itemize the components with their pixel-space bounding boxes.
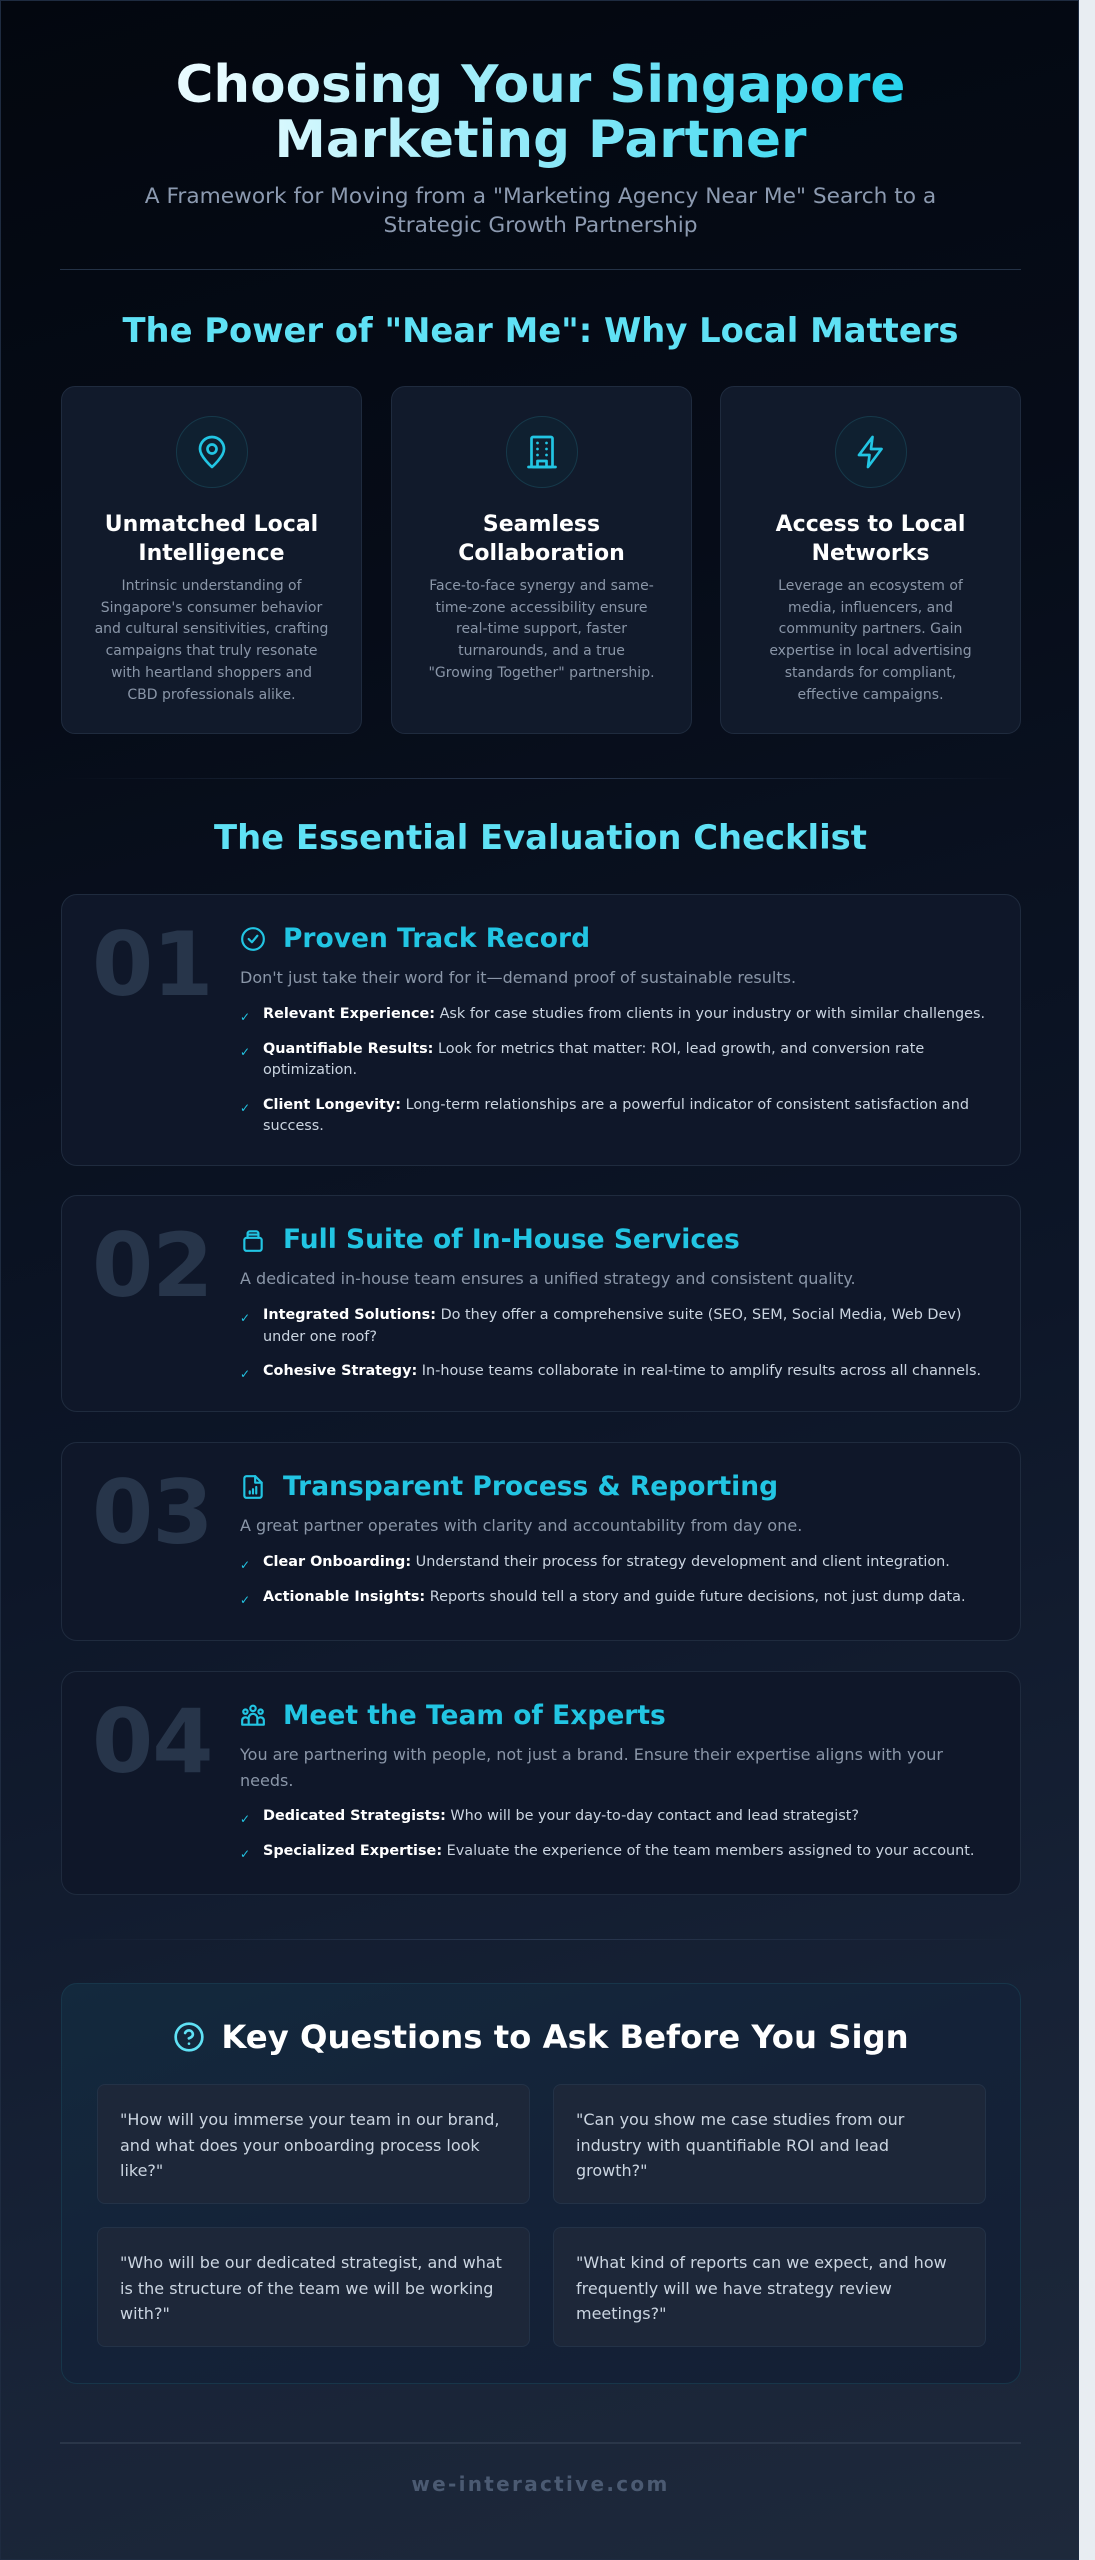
question 4: "What kind of reports can we expect, and how frequently will we have strategy review meetings?": [576, 2253, 947, 2323]
bullet list: Quantifiable Results: Look for metrics that matter: ROI, lead growth, and conversion rate optimization.: [263, 1040, 924, 1078]
bullet list: Client Longevity: Long-term relationships are a powerful indicator of consistent satisfaction and success.: [263, 1096, 969, 1134]
question 1: [97, 2084, 530, 2204]
bullet list: Actionable Insights: Reports should tell a story and guide future decisions, not just dump data.: [263, 1588, 966, 1604]
card subtitle: You are partnering with people, not just a brand. Ensure their expertise aligns with your needs.: [240, 1745, 943, 1790]
card text: "Growing Together" partnership.: [428, 665, 655, 681]
card text: [95, 578, 328, 703]
card text: campaigns that truly resonate: [106, 643, 317, 659]
icon: map pin: [176, 416, 248, 488]
title: Choosing Your Singapore: [176, 55, 905, 115]
heading: why local matters: The Power of "Near Me": Why Local Matters: [122, 311, 959, 350]
card subtitle: A great partner operates with clarity and accountability from day one.: [240, 1516, 802, 1535]
card text: time-zone accessibility ensure: [435, 600, 648, 616]
card title: Intelligence: [138, 541, 285, 566]
icon: lightning: [835, 416, 907, 488]
number 04: 04: [92, 1690, 212, 1793]
card text: real-time support, faster: [456, 621, 627, 637]
question 1: "How will you immerse your team in our brand, and what does your onboarding process look like?": [120, 2110, 500, 2180]
title: Marketing Partner: [274, 110, 806, 170]
bullet list: Specialized Expertise: Evaluate the experience of the team members assigned to your account.: [263, 1842, 975, 1858]
card text: with heartland shoppers and: [111, 665, 312, 681]
bullet list: [242, 1554, 966, 1604]
subtitle: Strategic Growth Partnership: [384, 213, 697, 238]
panel: key questions: [61, 1983, 1021, 2384]
subtitle: [145, 184, 936, 238]
panel: local networks: [720, 386, 1021, 734]
number 02: 02: [92, 1214, 212, 1317]
card title: [776, 512, 965, 566]
card text: community partners. Gain: [779, 621, 962, 637]
number 01: 01: [92, 913, 212, 1016]
title: [1, 58, 1080, 168]
card text: expertise in local advertising: [769, 643, 972, 659]
card subtitle: Don't just take their word for it—demand proof of sustainable results.: [240, 968, 796, 987]
card subtitle: A dedicated in-house team ensures a unified strategy and consistent quality.: [240, 1269, 856, 1288]
card text: [769, 578, 972, 703]
question 2: [553, 2084, 986, 2204]
heading: checklist: The Essential Evaluation Checklist: [214, 818, 867, 857]
panel: 03 transparent process: [61, 1442, 1021, 1641]
panel: 02 in-house services: [61, 1195, 1021, 1412]
bullet list: [242, 1307, 981, 1379]
bullet list: Clear Onboarding: Understand their process for strategy development and client integration.: [263, 1554, 950, 1570]
card title: Seamless: [483, 512, 600, 537]
panel: seamless collaboration: [391, 386, 692, 734]
panel: 04 team of experts: [61, 1671, 1021, 1895]
card title: Full Suite of In-House Services: [283, 1224, 740, 1255]
card text: [428, 578, 655, 681]
panel: 01 track record: [61, 894, 1021, 1166]
question 3: [97, 2227, 530, 2347]
icon: building: [506, 416, 578, 488]
bullet list: Cohesive Strategy: In-house teams collaborate in real-time to amplify results across all channels.: [263, 1363, 981, 1379]
panel: local intelligence: [61, 386, 362, 734]
card text: CBD professionals alike.: [127, 687, 296, 703]
card text: Face-to-face synergy and same-: [429, 578, 654, 594]
card text: Intrinsic understanding of: [121, 578, 302, 594]
card title: Unmatched Local: [105, 512, 318, 537]
question 2: "Can you show me case studies from our industry with quantifiable ROI and lead growth?": [576, 2110, 904, 2180]
card title: [105, 512, 318, 566]
card title: Meet the Team of Experts: [283, 1700, 666, 1731]
card title: Collaboration: [458, 541, 625, 566]
card title: [458, 512, 625, 566]
card text: standards for compliant,: [785, 665, 956, 681]
bullet list: [242, 1808, 975, 1858]
bullet list: Dedicated Strategists: Who will be your day-to-day contact and lead strategist?: [263, 1808, 859, 1824]
question 4: [553, 2227, 986, 2347]
card title: Proven Track Record: [283, 923, 590, 954]
card text: turnarounds, and a true: [458, 643, 625, 659]
bullet list: [242, 1006, 985, 1134]
card text: effective campaigns.: [797, 687, 944, 703]
card title: Access to Local: [776, 512, 965, 537]
card text: Singapore's consumer behavior: [101, 600, 322, 616]
bullet list: Integrated Solutions: Do they offer a comprehensive suite (SEO, SEM, Social Media, Web Dev) under one roof?: [263, 1307, 961, 1344]
card text: media, influencers, and: [788, 600, 953, 616]
card title: Networks: [812, 541, 929, 566]
card text: Leverage an ecosystem of: [778, 578, 963, 594]
footer: we-interactive.com: [411, 2472, 670, 2496]
subtitle: A Framework for Moving from a "Marketing Agency Near Me" Search to a: [145, 184, 936, 209]
bullet list: Relevant Experience: Ask for case studies from clients in your industry or with similar challenges.: [263, 1006, 985, 1022]
card title: Transparent Process & Reporting: [283, 1471, 778, 1502]
questions heading: Key Questions to Ask Before You Sign: [221, 2018, 909, 2056]
number 03: 03: [92, 1461, 212, 1564]
question 3: "Who will be our dedicated strategist, and what is the structure of the team we will be working with?": [120, 2253, 502, 2323]
card text: and cultural sensitivities, crafting: [95, 621, 328, 637]
